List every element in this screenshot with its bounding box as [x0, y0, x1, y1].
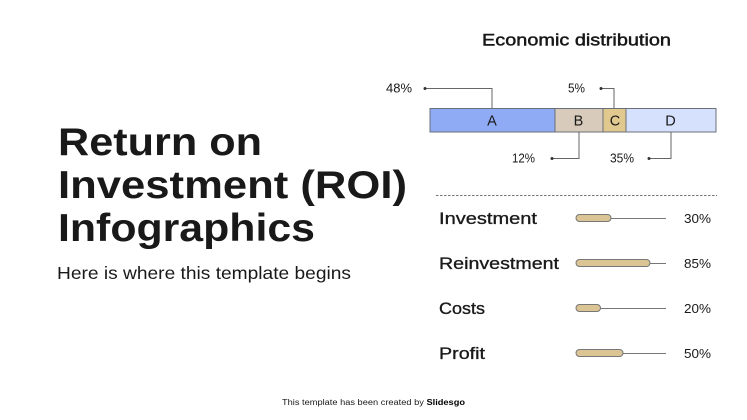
row: Reinvestment 85%: 85% [684, 256, 711, 271]
row: Investment 30%: Investment [439, 209, 537, 228]
callout: 5%: 5% [568, 82, 585, 96]
callout: 35% [610, 132, 671, 166]
row: Profit 50% [439, 344, 711, 363]
segment letters: B [574, 114, 583, 130]
callout: 12%: 12% [512, 152, 535, 166]
row: Reinvestment 85%: Reinvestment [439, 254, 559, 273]
title: Return on [58, 121, 262, 164]
row: Costs 20% [439, 299, 711, 318]
row: Reinvestment 85% [439, 254, 711, 273]
callout: 12% [512, 132, 579, 166]
callout: 35%: 35% [610, 152, 634, 166]
segment C [603, 108, 626, 132]
footer credit: This template has been created by Slidesgo [282, 398, 465, 407]
subtitle: Here is where this template begins [57, 263, 351, 283]
segment A [430, 108, 555, 132]
stacked distribution bar [430, 108, 716, 132]
title [58, 121, 407, 250]
callout: 48% [386, 82, 492, 108]
chart heading: Economic distribution [482, 32, 671, 50]
callout: 5% [568, 82, 614, 108]
title: Infographics [58, 207, 315, 250]
segment B [555, 108, 603, 132]
segment D [626, 108, 716, 132]
row: Investment 30%: 30% [684, 211, 711, 226]
title: Investment (ROI) [58, 164, 407, 207]
row: Profit 50%: Profit [439, 344, 485, 363]
callout: 48%: 48% [386, 82, 412, 96]
segment letters: D [665, 114, 676, 130]
row: Profit 50%: 50% [684, 346, 711, 361]
segment letters [487, 114, 676, 130]
row: Costs 20%: Costs [439, 299, 485, 318]
segment letters: C [610, 114, 620, 130]
segment letters: A [487, 114, 497, 130]
row: Investment 30% [439, 209, 711, 228]
row: Costs 20%: 20% [684, 301, 711, 316]
